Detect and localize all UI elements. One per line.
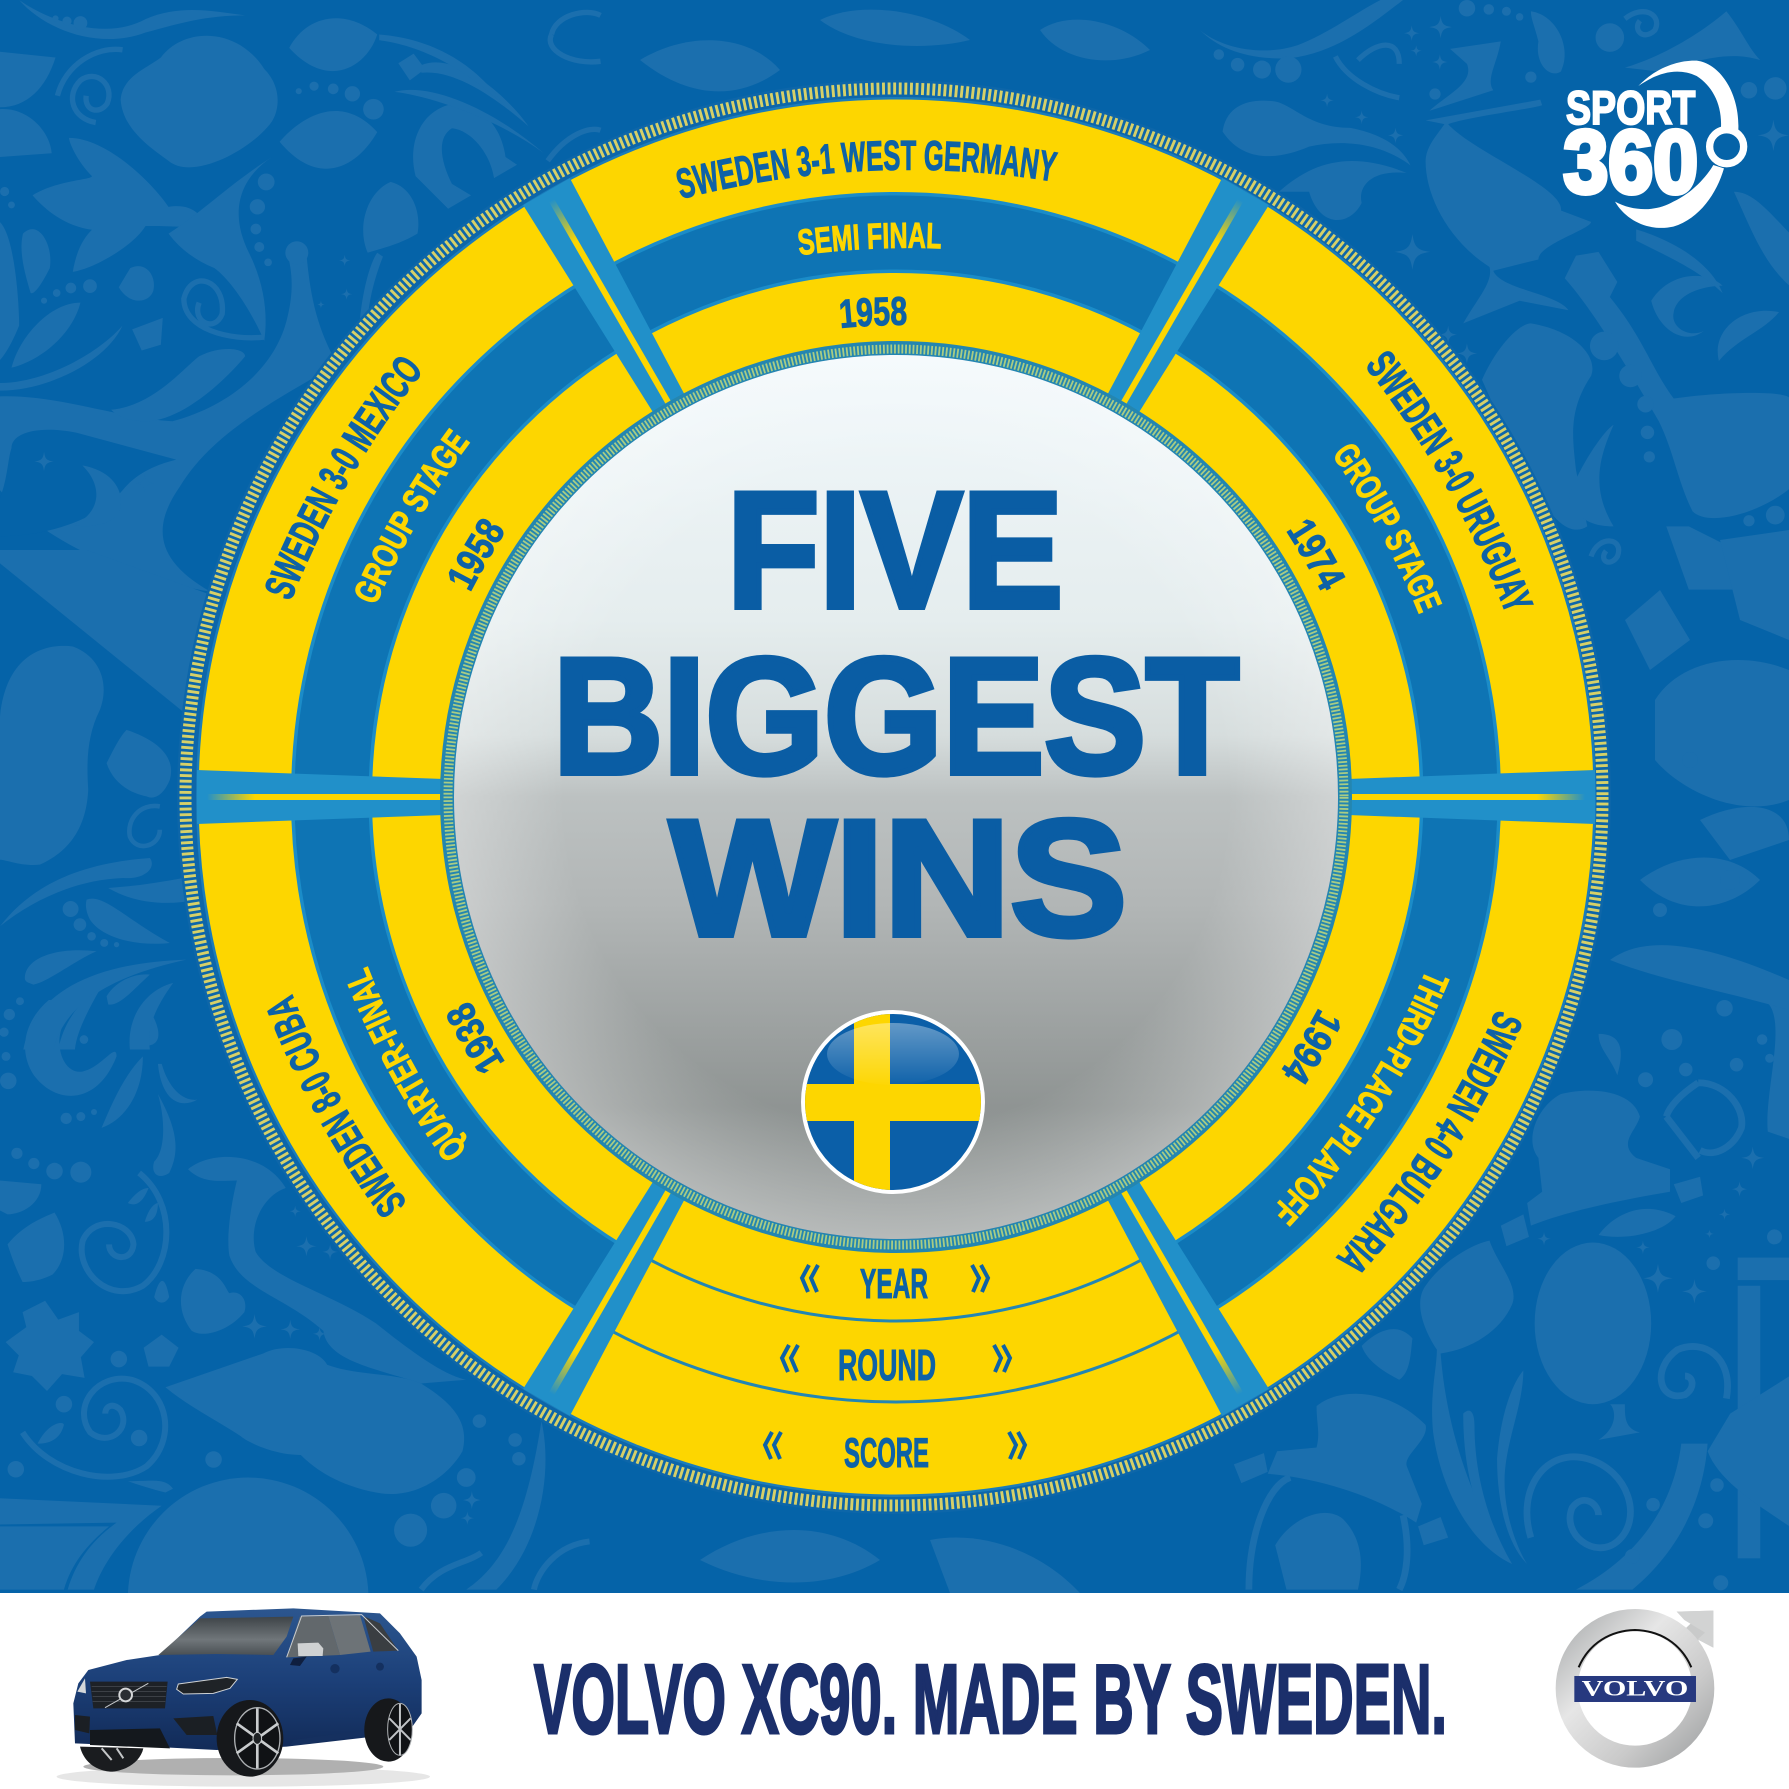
inner tick ring xyxy=(447,348,1345,1246)
title: WINS xyxy=(670,786,1127,970)
match: Sweden 3-0 Mexico, group stage, 1958: 1958 xyxy=(448,518,504,592)
match: Sweden 4-0 Bulgaria, third-place playoff, 1994: SWEDEN 4-0 BULGARIA xyxy=(1336,1012,1522,1273)
legend: year, round, score xyxy=(765,1260,1025,1476)
segment dividers xyxy=(197,178,1595,1416)
match: Sweden 3-0 Mexico, group stage, 1958: GROUP STAGE xyxy=(355,428,470,602)
car: Volvo XC90 xyxy=(57,1608,430,1787)
match: Sweden 3-0 Uruguay, group stage, 1974: GROUP STAGE xyxy=(1335,444,1442,614)
match: Sweden 4-0 Bulgaria, third-place playoff, 1994 xyxy=(1261,961,1542,1290)
title: FIVE xyxy=(727,458,1063,642)
match: Sweden 8-0 Cuba, quarter-final, 1938 xyxy=(249,959,514,1230)
panel: wheel of wins xyxy=(180,82,1608,1512)
match: Sweden 3-0 Uruguay, group stage, 1974: SWEDEN 3-0 URUGUAY xyxy=(1367,351,1534,610)
match: Sweden 4-0 Bulgaria, third-place playoff, 1994: 1994 xyxy=(1282,1008,1340,1085)
title xyxy=(553,458,1239,970)
match: Sweden 3-0 Uruguay, group stage, 1974: 1974 xyxy=(1286,519,1346,590)
outer tick ring xyxy=(186,88,1602,1506)
title: BIGGEST xyxy=(553,624,1239,808)
icon: Sweden flag xyxy=(801,1010,985,1194)
logo: Volvo xyxy=(1567,1611,1713,1757)
match: Sweden 3-0 Mexico, group stage, 1958 xyxy=(265,357,504,602)
match: Sweden 8-0 Cuba, quarter-final, 1938: 1938 xyxy=(447,1002,505,1074)
logo: Volvo: VOLVO xyxy=(1582,1676,1688,1701)
legend: year, round, score: SCORE xyxy=(844,1429,929,1476)
legend segment xyxy=(594,1251,1198,1402)
match: Sweden 3-1 West Germany, semi final, 1958: 1958 xyxy=(840,296,907,328)
match: Sweden 3-0 Uruguay, group stage, 1974 xyxy=(1286,351,1534,614)
yellow ring xyxy=(320,221,1472,1373)
blue ring xyxy=(332,232,1460,1362)
legend: year, round, score: ROUND xyxy=(838,1341,936,1390)
logo: Sport 360: 360 xyxy=(1563,112,1698,212)
match: Sweden 3-1 West Germany, semi final, 1958 xyxy=(676,140,1058,328)
match: Sweden 3-1 West Germany, semi final, 1958: SWEDEN 3-1 WEST GERMANY xyxy=(676,140,1058,198)
match: Sweden 4-0 Bulgaria, third-place playoff, 1994: THIRD-PLACE PLAYOFF xyxy=(1277,974,1450,1227)
central sphere xyxy=(454,355,1338,1239)
match: Sweden 8-0 Cuba, quarter-final, 1938: SWEDEN 8-0 CUBA xyxy=(267,994,405,1217)
match: Sweden 3-1 West Germany, semi final, 1958: SEMI FINAL xyxy=(798,222,941,255)
legend: year, round, score: YEAR xyxy=(860,1260,928,1307)
match: Sweden 3-0 Mexico, group stage, 1958: SWEDEN 3-0 MEXICO xyxy=(265,357,420,599)
match: Sweden 8-0 Cuba, quarter-final, 1938: QUARTER-FINAL xyxy=(347,966,466,1160)
logo: Sport 360 xyxy=(1563,61,1744,228)
logo: Sport 360: SPORT xyxy=(1566,82,1695,135)
footer band xyxy=(0,1593,1789,1789)
